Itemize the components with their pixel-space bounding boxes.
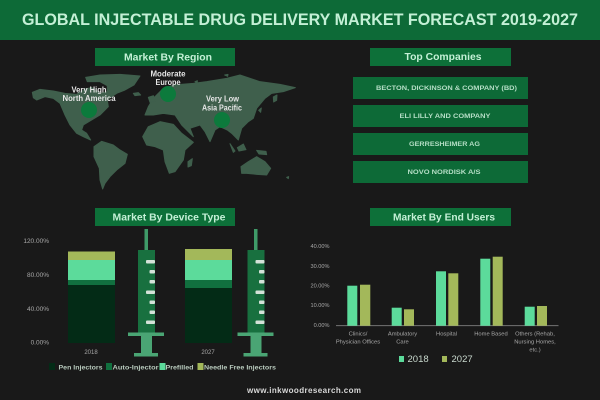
map: eastern hemisphere <box>143 74 295 179</box>
category labels: end users chart: Ambulatory <box>388 332 417 338</box>
bars: others <box>525 306 547 326</box>
heading: top companies: Top Companies <box>404 52 482 63</box>
map: islands <box>195 74 289 179</box>
category labels: end users chart: Care <box>396 340 409 346</box>
category labels: end users chart: Hospital <box>436 332 457 338</box>
website footer: www.inkwoodresearch.com <box>246 386 361 395</box>
company: Eli Lilly <box>353 105 528 127</box>
heading: market by end users: Market By End Users <box>393 212 495 224</box>
y axis labels: device chart <box>23 238 49 346</box>
map: south america <box>94 141 127 189</box>
y axis labels: end users chart <box>311 244 330 329</box>
title banner <box>0 0 600 40</box>
map: british isles <box>148 96 156 102</box>
bars: hospital <box>436 271 458 326</box>
category labels: end users chart: etc.) <box>529 348 541 354</box>
stacked bar: 2018: 2018 <box>84 350 98 356</box>
marker: north america <box>81 102 97 118</box>
label: europe: Europe <box>156 78 181 87</box>
company: BD: BECTON, DICKINSON & COMPANY (BD) <box>376 85 517 92</box>
heading: top companies <box>370 48 511 66</box>
company: Gerresheimer: GERRESHEIMER AG <box>409 141 480 148</box>
label: north america <box>62 86 116 103</box>
map: eurasia <box>145 75 295 142</box>
legend: end users <box>399 354 473 365</box>
stacked bar: 2027 <box>185 249 232 356</box>
legend: device type: Needle Free Injectors <box>204 364 276 372</box>
marker: europe <box>160 86 176 102</box>
map: iceland-greenland fragment <box>133 93 141 96</box>
world map <box>32 74 295 189</box>
category labels: end users chart: Nursing Homes, <box>514 340 556 346</box>
marker: asia pacific <box>214 112 230 128</box>
category labels: end users chart: Home Based <box>474 332 508 338</box>
company list <box>353 77 528 183</box>
y axis labels: device chart: 120.00% <box>23 238 49 245</box>
y axis labels: end users chart: 30.00% <box>311 264 330 270</box>
heading: market by device type <box>95 208 235 226</box>
title banner: GLOBAL INJECTABLE DRUG DELIVERY MARKET FORECAST 2019-2027 <box>22 10 578 29</box>
category labels: end users chart: Clinics/ <box>349 332 368 338</box>
icon: syringe 2018 <box>128 229 164 356</box>
category labels: end users chart: Physician Offices <box>336 340 380 346</box>
map: americas <box>32 74 141 189</box>
category labels: end users chart <box>336 332 556 354</box>
category labels: end users chart: Others (Rehab, <box>515 332 555 338</box>
legend: device type: Pen Injectors <box>58 364 103 372</box>
y axis labels: device chart: 80.00% <box>27 272 49 279</box>
label: europe <box>150 70 186 87</box>
label: asia pacific: Asia Pacific <box>202 103 242 112</box>
legend: end users: 2027 <box>452 354 473 365</box>
legend: device type: Prefilled <box>166 364 194 372</box>
y axis labels: end users chart: 10.00% <box>311 303 330 309</box>
label: asia pacific: Very Low <box>206 95 240 104</box>
y axis labels: device chart: 40.00% <box>27 306 49 313</box>
bars: clinics <box>347 285 370 326</box>
label: asia pacific <box>202 95 242 112</box>
y axis labels: end users chart: 40.00% <box>311 244 330 250</box>
bar chart: end users <box>336 257 558 326</box>
label: north america: Very High <box>72 86 107 94</box>
map: australia <box>241 157 271 175</box>
heading: market by region: Market By Region <box>124 52 212 64</box>
company: BD <box>353 77 528 99</box>
map: north america <box>32 74 140 140</box>
bars: ambulatory care <box>392 308 414 326</box>
company: Eli Lilly: ELI LILLY AND COMPANY <box>400 113 491 120</box>
label: north america: North America <box>62 94 116 103</box>
company: Gerresheimer <box>353 133 528 155</box>
stacked bar: 2018 <box>68 252 115 356</box>
icon: syringe 2027 <box>238 229 274 356</box>
legend: device type <box>49 363 276 372</box>
y axis labels: end users chart: 20.00% <box>311 284 330 290</box>
label: europe: Moderate <box>150 70 186 78</box>
company: Novo Nordisk <box>353 161 528 183</box>
markers and labels: regions <box>62 70 242 128</box>
y axis labels: end users chart: 0.00% <box>314 323 330 329</box>
heading: market by end users <box>370 208 511 226</box>
map: africa <box>143 122 193 173</box>
stacked bar: 2027: 2027 <box>201 350 215 356</box>
company: Novo Nordisk: NOVO NORDISK A/S <box>408 169 481 176</box>
heading: market by region <box>95 48 235 66</box>
bars: home based <box>480 257 503 326</box>
y axis labels: device chart: 0.00% <box>31 340 49 346</box>
heading: market by device type: Market By Device Type <box>112 212 226 224</box>
legend: device type: Auto-Injector <box>112 364 159 372</box>
map: madagascar <box>188 159 192 167</box>
legend: end users: 2018 <box>408 354 429 365</box>
